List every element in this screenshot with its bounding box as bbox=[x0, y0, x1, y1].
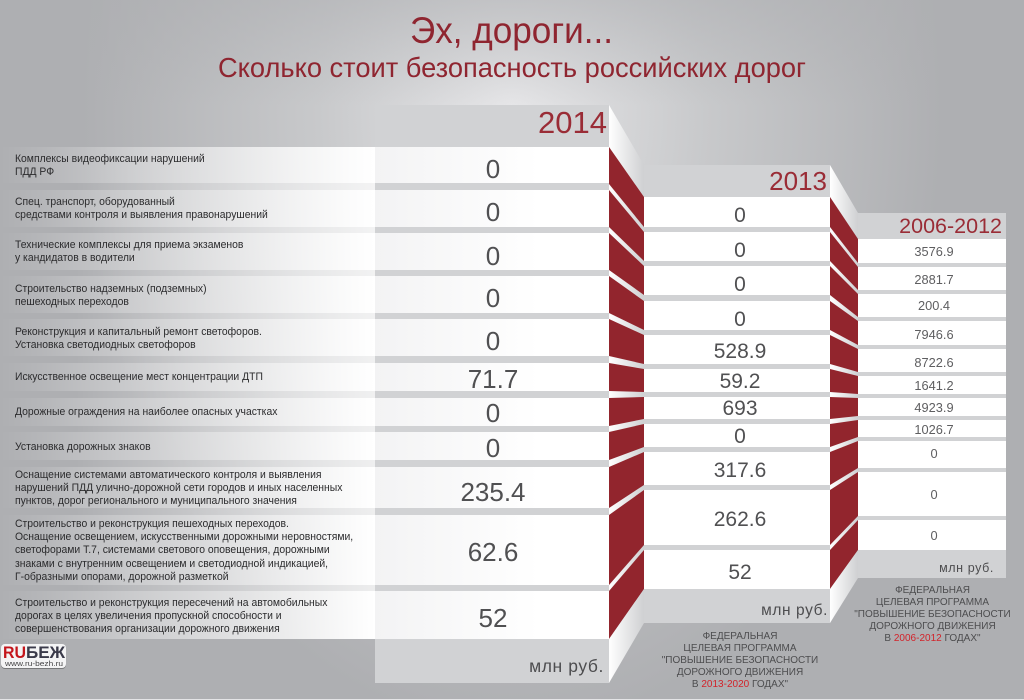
values 2013: 0 bbox=[734, 239, 746, 262]
values 2014: 0 bbox=[486, 283, 500, 313]
unit label 2014: млн руб. bbox=[529, 656, 604, 676]
connector: 2014 to 2013 bbox=[609, 105, 644, 683]
text block: program 2013-2020: ЦЕЛЕВАЯ ПРОГРАММА bbox=[683, 643, 797, 654]
values 2006-2012: 3576.9 bbox=[914, 244, 954, 259]
text block: program 2013-2020 bbox=[662, 631, 818, 690]
values 2014: 235.4 bbox=[460, 477, 526, 507]
values 2006-2012: 4923.9 bbox=[914, 400, 954, 415]
text block: row labels: Строительство и реконструкция пешеходных переходов. bbox=[15, 518, 289, 530]
values 2006-2012 bbox=[914, 244, 954, 543]
text block: row labels: Оснащение системами автоматического контроля и выявления bbox=[15, 469, 322, 481]
unit label 2013: млн руб. bbox=[761, 602, 828, 619]
text block: program 2006-2012: ДОРОЖНОГО ДВИЖЕНИЯ bbox=[869, 621, 996, 632]
text block: program 2006-2012 bbox=[854, 585, 1011, 644]
text block: row labels: пешеходных переходов bbox=[15, 296, 129, 308]
text block: row labels: Установка светодиодных светофоров bbox=[15, 339, 196, 351]
text block: program 2013-2020: ДОРОЖНОГО ДВИЖЕНИЯ bbox=[677, 667, 803, 678]
text block: program 2006-2012: ЦЕЛЕВАЯ ПРОГРАММА bbox=[876, 597, 989, 608]
values 2013: 0 bbox=[734, 204, 746, 227]
panel: column 2006-2012 bbox=[858, 213, 1006, 578]
values 2014: 62.6 bbox=[468, 537, 518, 567]
text block: row labels: Оснащение освещением, искусственными дорожными неровностями, bbox=[15, 531, 353, 543]
values 2014: 0 bbox=[486, 326, 500, 356]
text block: row labels: Строительство надземных (подземных) bbox=[15, 283, 207, 295]
panel: row label backgrounds bbox=[0, 147, 375, 639]
text block: program 2006-2012: ФЕДЕРАЛЬНАЯ bbox=[895, 585, 970, 596]
values 2013: 52 bbox=[728, 561, 752, 584]
values 2014: 0 bbox=[486, 154, 500, 184]
text block: row labels: Строительство и реконструкция пересечений на автомобильных bbox=[15, 597, 328, 609]
values 2014: 71.7 bbox=[468, 364, 518, 394]
text block: row labels: светофорами Т.7, системами светового оповещения, дорожными bbox=[15, 544, 330, 556]
logo: RUБЕЖ bbox=[1, 643, 66, 669]
text block: row labels: средствами контроля и выявления правонарушений bbox=[15, 209, 268, 221]
values 2006-2012: 0 bbox=[930, 487, 938, 502]
values 2013: 528.9 bbox=[714, 340, 766, 363]
heading: 2014: 2014 bbox=[538, 105, 607, 140]
title: Эх, дороги... bbox=[410, 10, 613, 51]
text block: program 2013-2020: "ПОВЫШЕНИЕ БЕЗОПАСНОСТИ bbox=[662, 655, 818, 666]
text block: program 2013-2020: В 2013-2020 ГОДАХ" bbox=[692, 679, 789, 690]
values 2014: 0 bbox=[486, 433, 500, 463]
text block: program 2006-2012: "ПОВЫШЕНИЕ БЕЗОПАСНОСТИ bbox=[854, 609, 1011, 620]
text block: row labels: Установка дорожных знаков bbox=[15, 441, 151, 453]
text block: row labels: Дорожные ограждения на наиболее опасных участках bbox=[15, 406, 278, 418]
heading: 2006-2012: 2006-2012 bbox=[899, 214, 1002, 238]
values 2013 bbox=[714, 204, 766, 584]
values 2014: 52 bbox=[479, 603, 507, 633]
text block: row labels: совершенствования организации дорожного движения bbox=[15, 623, 280, 635]
unit label 2006-2012: млн руб. bbox=[939, 561, 994, 575]
values 2013: 0 bbox=[734, 308, 746, 331]
values 2013: 0 bbox=[734, 425, 746, 448]
values 2014: 0 bbox=[486, 241, 500, 271]
subtitle: Сколько стоит безопасность российских дорог bbox=[218, 52, 806, 83]
text block: program 2006-2012: В 2006-2012 ГОДАХ" bbox=[884, 633, 981, 644]
logo: RUБЕЖ: www.ru-bezh.ru bbox=[4, 661, 63, 668]
values 2014: 0 bbox=[486, 197, 500, 227]
values 2013: 0 bbox=[734, 273, 746, 296]
text block: row labels: Комплексы видеофиксации нарушений bbox=[15, 153, 205, 165]
values 2006-2012: 1026.7 bbox=[914, 422, 954, 437]
text block: row labels: Спец. транспорт, оборудованный bbox=[15, 196, 175, 208]
values 2006-2012: 1641.2 bbox=[914, 378, 954, 393]
values 2013: 262.6 bbox=[714, 508, 766, 531]
values 2013: 59.2 bbox=[720, 370, 760, 393]
connector: 2013 to 2006-2012 bbox=[830, 165, 858, 623]
text block: row labels: Г-образными опорами, дорожной разметкой bbox=[15, 571, 229, 583]
text block: row labels: пунктов, дорог регионального и муниципального значения bbox=[15, 495, 297, 507]
text block: row labels: нарушений ПДД улично-дорожной сети городов и иных населенных bbox=[15, 482, 343, 494]
values 2014 bbox=[460, 154, 526, 633]
text block: row labels bbox=[15, 153, 353, 635]
text block: row labels: Технические комплексы для приема экзаменов bbox=[15, 239, 244, 251]
values 2014: 0 bbox=[486, 398, 500, 428]
logo: RUБЕЖ: БЕЖ bbox=[26, 643, 66, 662]
text block: row labels: знаками с внутренним освещением и светодиодной индикацией, bbox=[15, 558, 328, 570]
panel: column 2013 bbox=[644, 165, 830, 623]
text block: program 2013-2020: ФЕДЕРАЛЬНАЯ bbox=[703, 631, 777, 642]
text block: row labels: дорогах в целях увеличения пропускной способности и bbox=[15, 610, 282, 622]
logo: RUБЕЖ: RU bbox=[3, 643, 26, 662]
text block: row labels: Искусственное освещение мест концентрации ДТП bbox=[15, 371, 263, 383]
heading: 2013: 2013 bbox=[769, 166, 827, 196]
values 2006-2012: 2881.7 bbox=[914, 272, 954, 287]
values 2013: 693 bbox=[722, 397, 758, 420]
values 2006-2012: 0 bbox=[930, 528, 938, 543]
values 2006-2012: 7946.6 bbox=[914, 327, 954, 342]
text block: row labels: Реконструкция и капитальный ремонт светофоров. bbox=[15, 326, 262, 338]
text block: row labels: ПДД РФ bbox=[15, 166, 54, 178]
values 2006-2012: 200.4 bbox=[918, 298, 950, 313]
values 2013: 317.6 bbox=[714, 459, 766, 482]
panel: column 2014 bbox=[375, 105, 609, 683]
values 2006-2012: 0 bbox=[930, 446, 938, 461]
text block: row labels: у кандидатов в водители bbox=[15, 252, 135, 264]
values 2006-2012: 8722.6 bbox=[914, 355, 954, 370]
